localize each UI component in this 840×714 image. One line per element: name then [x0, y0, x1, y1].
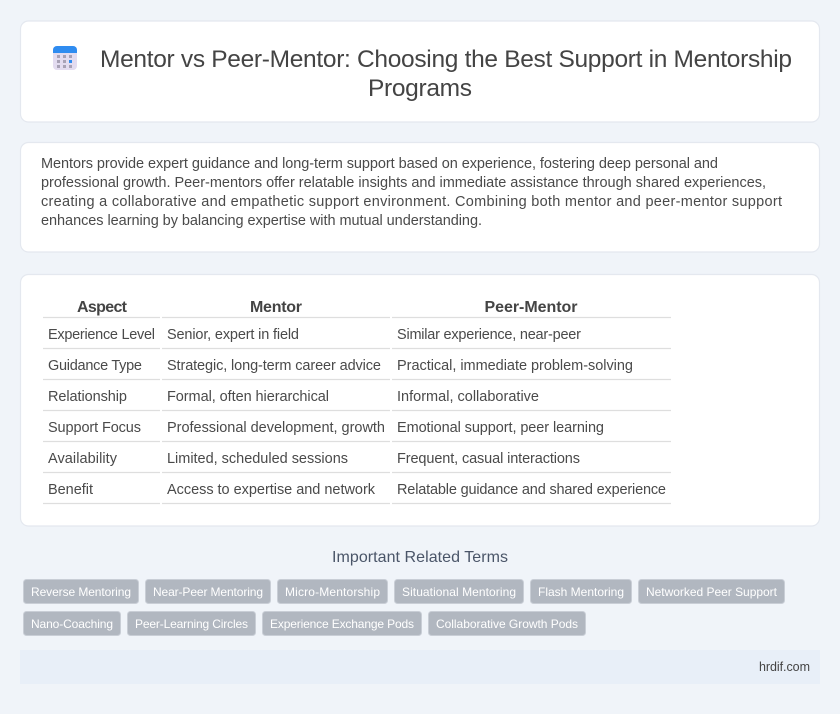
tag: micro-mentorship: Micro-Mentorship — [285, 585, 380, 599]
row: guidance type: Strategic, long-term career advice — [167, 358, 381, 374]
tag: peer-learning circles: Peer-Learning Circles — [135, 617, 248, 631]
panel: intro text — [20, 142, 820, 252]
panel: intro text: Mentors provide expert guidance and long-term support based on experience, fostering deep personal and — [41, 156, 718, 172]
tag: collaborative growth pods: Collaborative Growth Pods — [436, 617, 578, 631]
title — [100, 46, 792, 102]
row: benefit: Relatable guidance and shared experience — [397, 482, 666, 498]
footer band — [20, 650, 820, 684]
tag: networked peer support: Networked Peer Support — [646, 585, 778, 599]
tag: situational mentoring — [394, 580, 524, 604]
panel: intro text: enhances learning by balancing expertise with mutual understanding. — [41, 213, 482, 229]
tag: reverse mentoring: Reverse Mentoring — [31, 585, 131, 599]
tag: experience exchange pods: Experience Exchange Pods — [270, 617, 414, 631]
row: availability — [48, 451, 580, 467]
table header — [77, 299, 578, 316]
row: support focus — [48, 420, 604, 436]
tag: collaborative growth pods — [428, 612, 586, 636]
row: relationship: Relationship — [48, 389, 127, 405]
tag: peer-learning circles — [128, 612, 256, 636]
row: guidance type: Guidance Type — [48, 358, 142, 374]
row: experience level — [48, 327, 581, 343]
title: Programs — [368, 75, 472, 102]
tag: near-peer mentoring — [146, 580, 270, 604]
row: experience level: Similar experience, near-peer — [397, 327, 581, 343]
icon: calendar — [53, 46, 77, 70]
panel: intro text: professional growth. Peer-mentors offer relatable insights and immediate assistance through shared experiences, — [41, 175, 766, 191]
tag: reverse mentoring — [24, 580, 138, 604]
row: relationship: Informal, collaborative — [397, 389, 539, 405]
panel: intro text: creating a collaborative and empathetic support environment. Combining both mentor and peer-mentor support — [41, 194, 782, 210]
tag: nano-coaching — [24, 612, 120, 636]
row: benefit: Benefit — [48, 482, 93, 498]
table header: Mentor — [250, 299, 302, 316]
tag: experience exchange pods — [262, 612, 422, 636]
row: benefit: Access to expertise and network — [167, 482, 376, 498]
tag: flash mentoring — [530, 580, 632, 604]
row: experience level: Senior, expert in field — [167, 327, 299, 343]
footer band: hrdif.com — [759, 660, 810, 674]
row: guidance type — [48, 358, 633, 374]
row: availability: Frequent, casual interactions — [397, 451, 580, 467]
tag: situational mentoring: Situational Mentoring — [402, 585, 516, 599]
tag: micro-mentorship — [278, 580, 388, 604]
table header: Aspect — [77, 299, 128, 316]
panel: comparison table — [20, 274, 820, 526]
row: experience level: Experience Level — [48, 327, 155, 343]
row: availability: Availability — [48, 451, 118, 467]
tag: nano-coaching: Nano-Coaching — [31, 617, 113, 631]
row: support focus: Support Focus — [48, 420, 141, 436]
row: availability: Limited, scheduled sessions — [167, 451, 348, 467]
title: Mentor vs Peer-Mentor: Choosing the Best Support in Mentorship — [100, 46, 792, 73]
tag: flash mentoring: Flash Mentoring — [538, 585, 624, 599]
row: relationship — [48, 389, 539, 405]
heading: related terms: Important Related Terms — [332, 549, 508, 566]
table header: Peer-Mentor — [484, 299, 578, 316]
panel: title header — [20, 21, 820, 122]
row: benefit — [48, 482, 666, 498]
row: guidance type: Practical, immediate problem-solving — [397, 358, 633, 374]
related term tags — [24, 580, 784, 636]
row: support focus: Emotional support, peer learning — [397, 420, 604, 436]
row: support focus: Professional development, growth — [167, 420, 385, 436]
tag: networked peer support — [638, 580, 784, 604]
row: relationship: Formal, often hierarchical — [167, 389, 329, 405]
tag: near-peer mentoring: Near-Peer Mentoring — [153, 585, 263, 599]
